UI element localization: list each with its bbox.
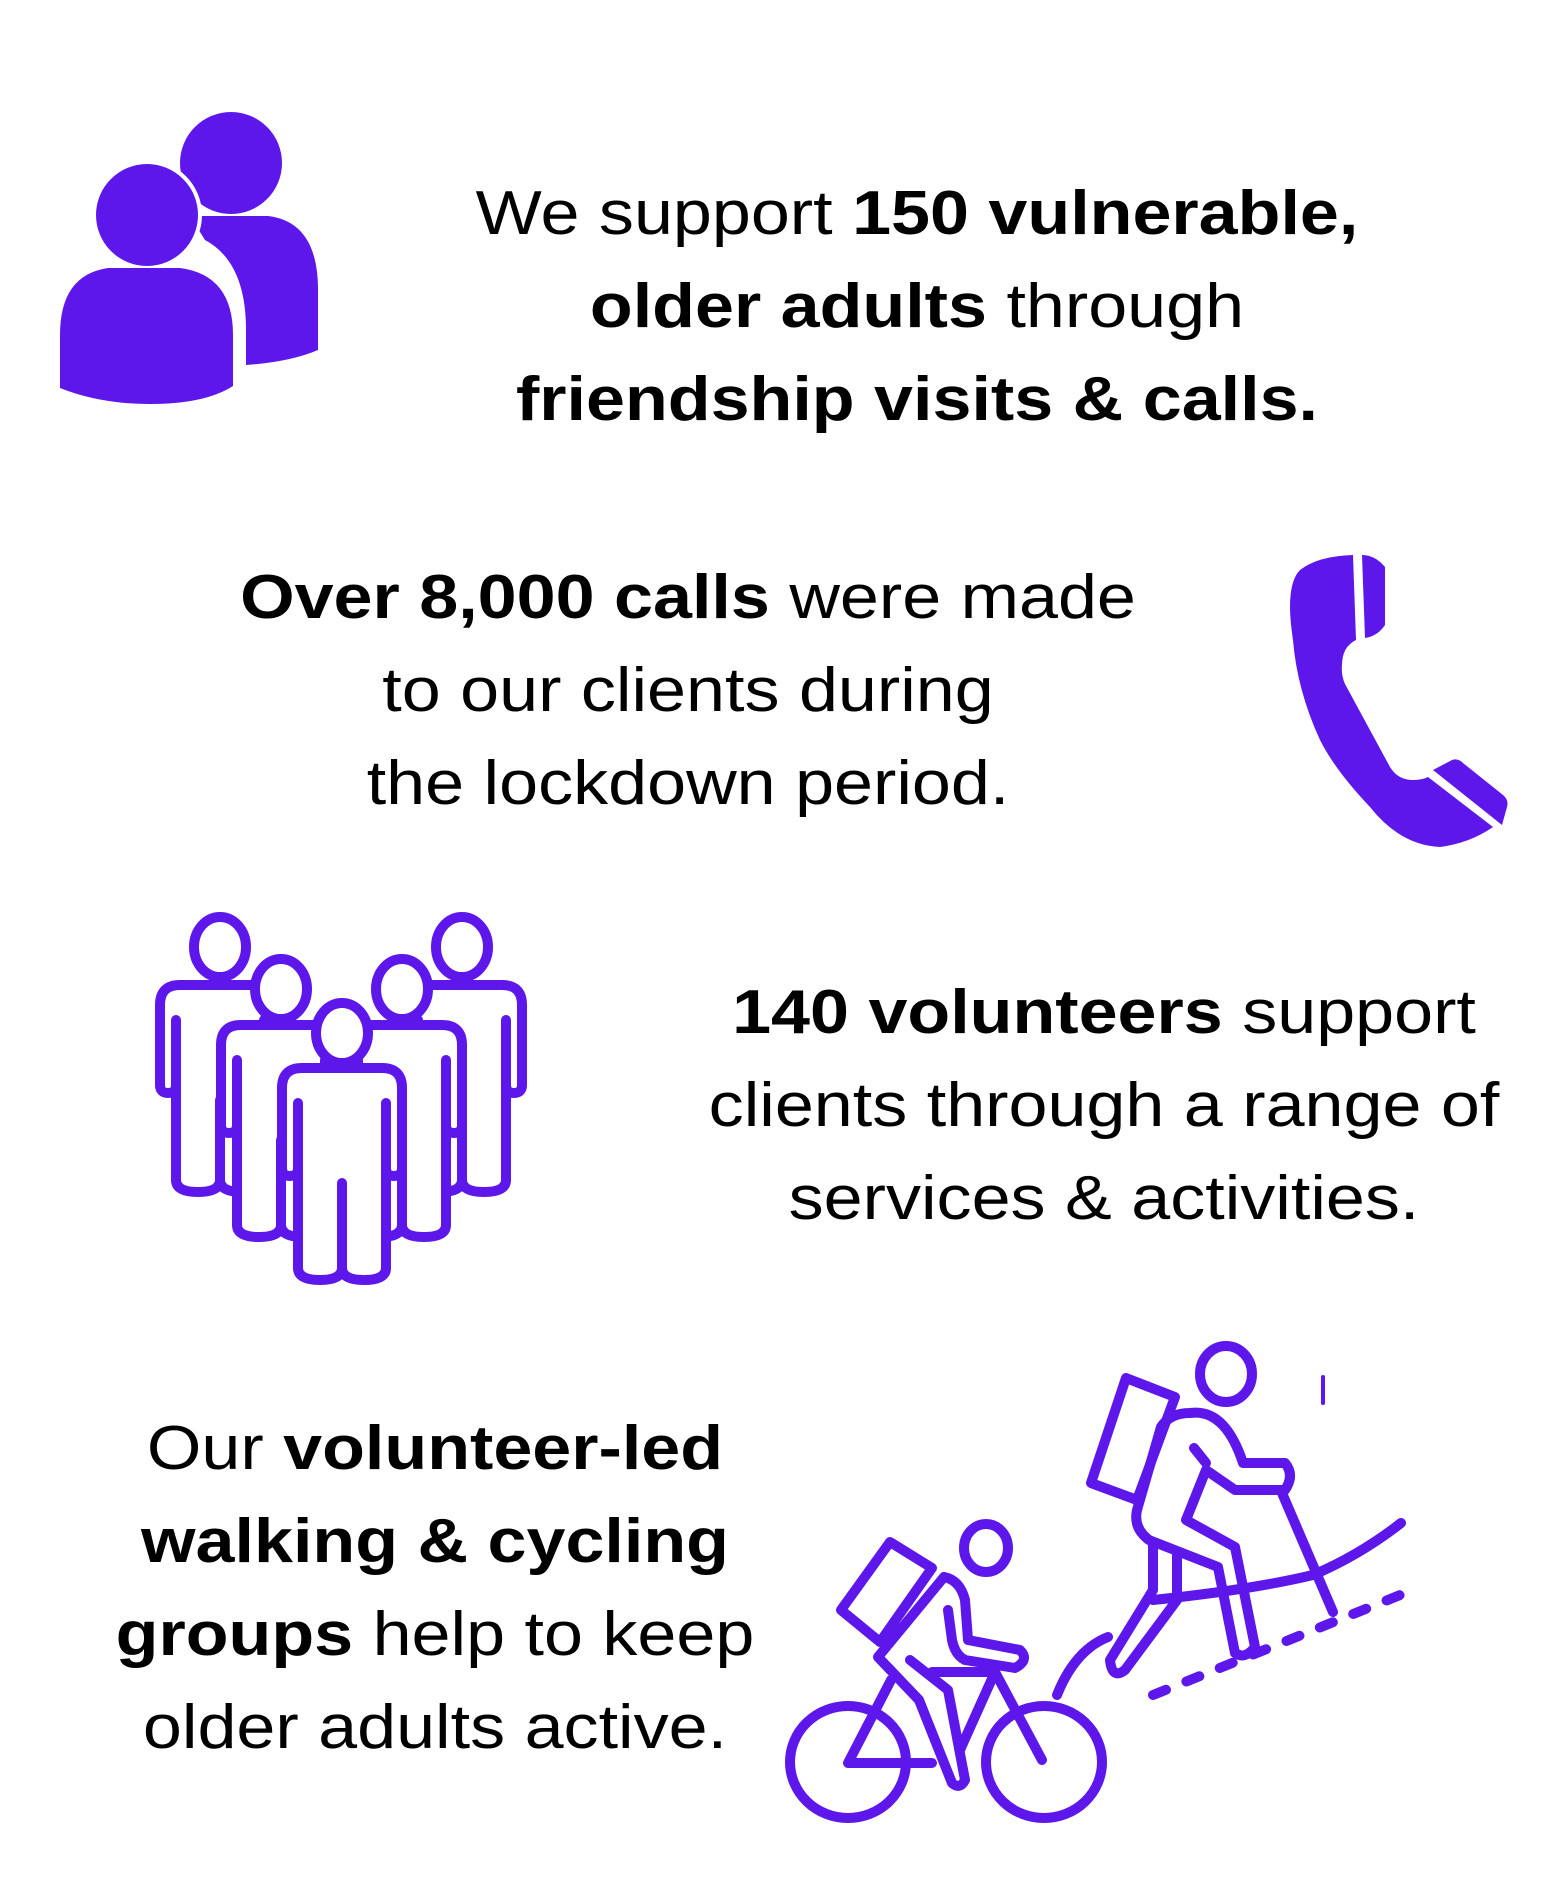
text block: walking and cycling groups (116, 1414, 754, 1762)
text block: 140 volunteers: 140 volunteers support (732, 978, 1476, 1047)
text block: walking and cycling groups: groups help to keep (116, 1600, 754, 1669)
icon: cyclist and hiker (790, 1346, 1405, 1818)
icon: phone (1290, 555, 1508, 847)
text block: over 8,000 calls: the lockdown period. (367, 749, 1009, 818)
text block: 150 vulnerable older adults: older adults through (590, 272, 1244, 341)
text block: 140 volunteers (709, 978, 1500, 1233)
text block: 140 volunteers: services & activities. (789, 1164, 1419, 1233)
text block: walking and cycling groups: older adults active. (143, 1693, 727, 1762)
text block: over 8,000 calls (240, 563, 1136, 818)
icon: two people (60, 112, 318, 404)
text block: walking and cycling groups: Our volunteer-led (147, 1414, 723, 1483)
text block: over 8,000 calls: to our clients during (382, 656, 994, 725)
text block: 150 vulnerable older adults (476, 179, 1358, 434)
icon: group of volunteers (160, 917, 522, 1280)
text block: walking and cycling groups: walking & cycling (141, 1507, 729, 1576)
text block: over 8,000 calls: Over 8,000 calls were made (240, 563, 1136, 632)
text block: 150 vulnerable older adults: friendship visits & calls. (516, 365, 1318, 434)
text block: 150 vulnerable older adults: We support 150 vulnerable, (476, 179, 1358, 248)
text block: 140 volunteers: clients through a range of (709, 1071, 1499, 1140)
